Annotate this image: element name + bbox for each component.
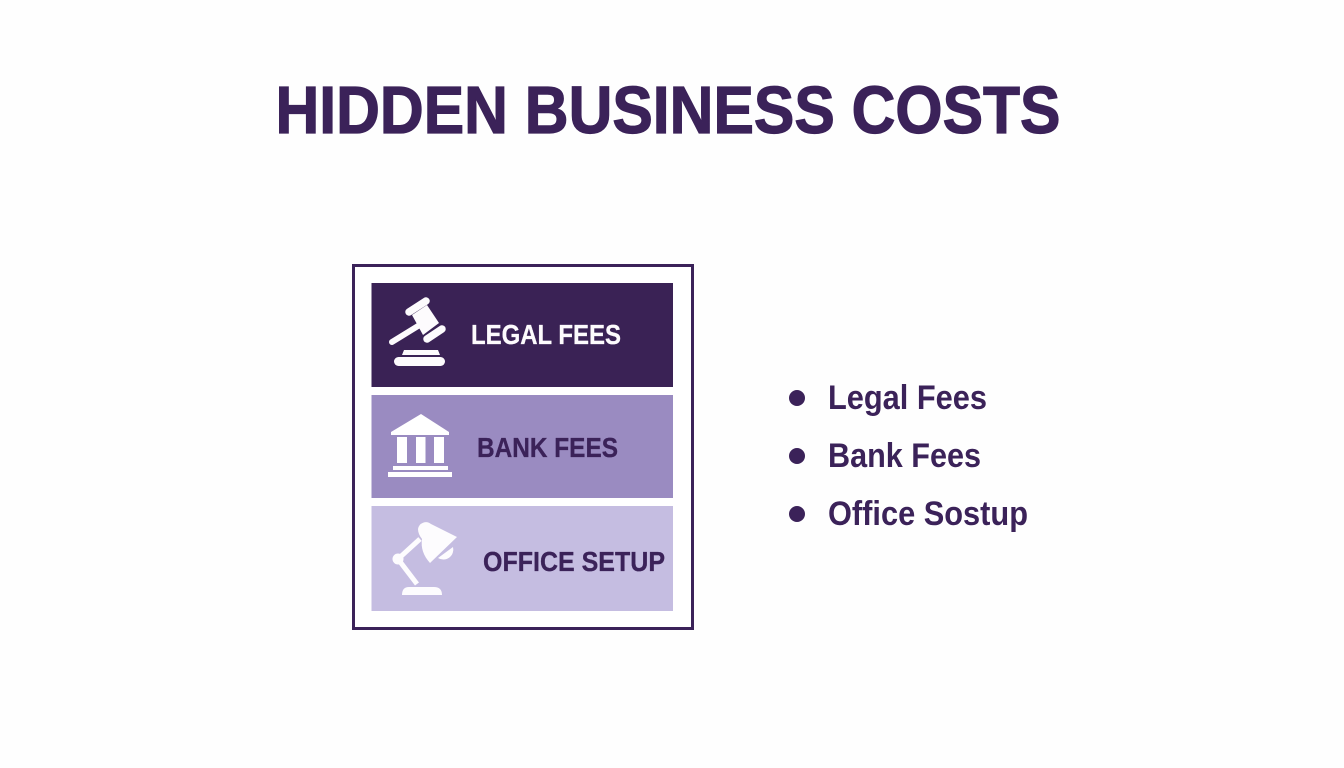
label: office setup: OFFICE SETUP bbox=[483, 546, 665, 577]
bullet: bank fees: Bank Fees bbox=[828, 437, 981, 475]
panel: bank fees bbox=[372, 395, 673, 498]
icon: bank building bbox=[388, 414, 452, 477]
label: bank fees: BANK FEES bbox=[477, 432, 618, 463]
bullet: office setup: Office Sostup bbox=[828, 495, 1028, 533]
icon: gavel bbox=[392, 301, 445, 366]
label: legal fees: LEGAL FEES bbox=[471, 319, 621, 350]
bullet list bbox=[789, 379, 1028, 533]
panel: cost stack bbox=[354, 266, 692, 628]
panel: office setup bbox=[372, 506, 673, 611]
icon: desk lamp bbox=[392, 522, 457, 595]
panel: legal fees bbox=[372, 283, 673, 387]
bullet: legal fees: Legal Fees bbox=[828, 379, 987, 417]
title: HIDDEN BUSINESS COSTS bbox=[276, 73, 1060, 148]
